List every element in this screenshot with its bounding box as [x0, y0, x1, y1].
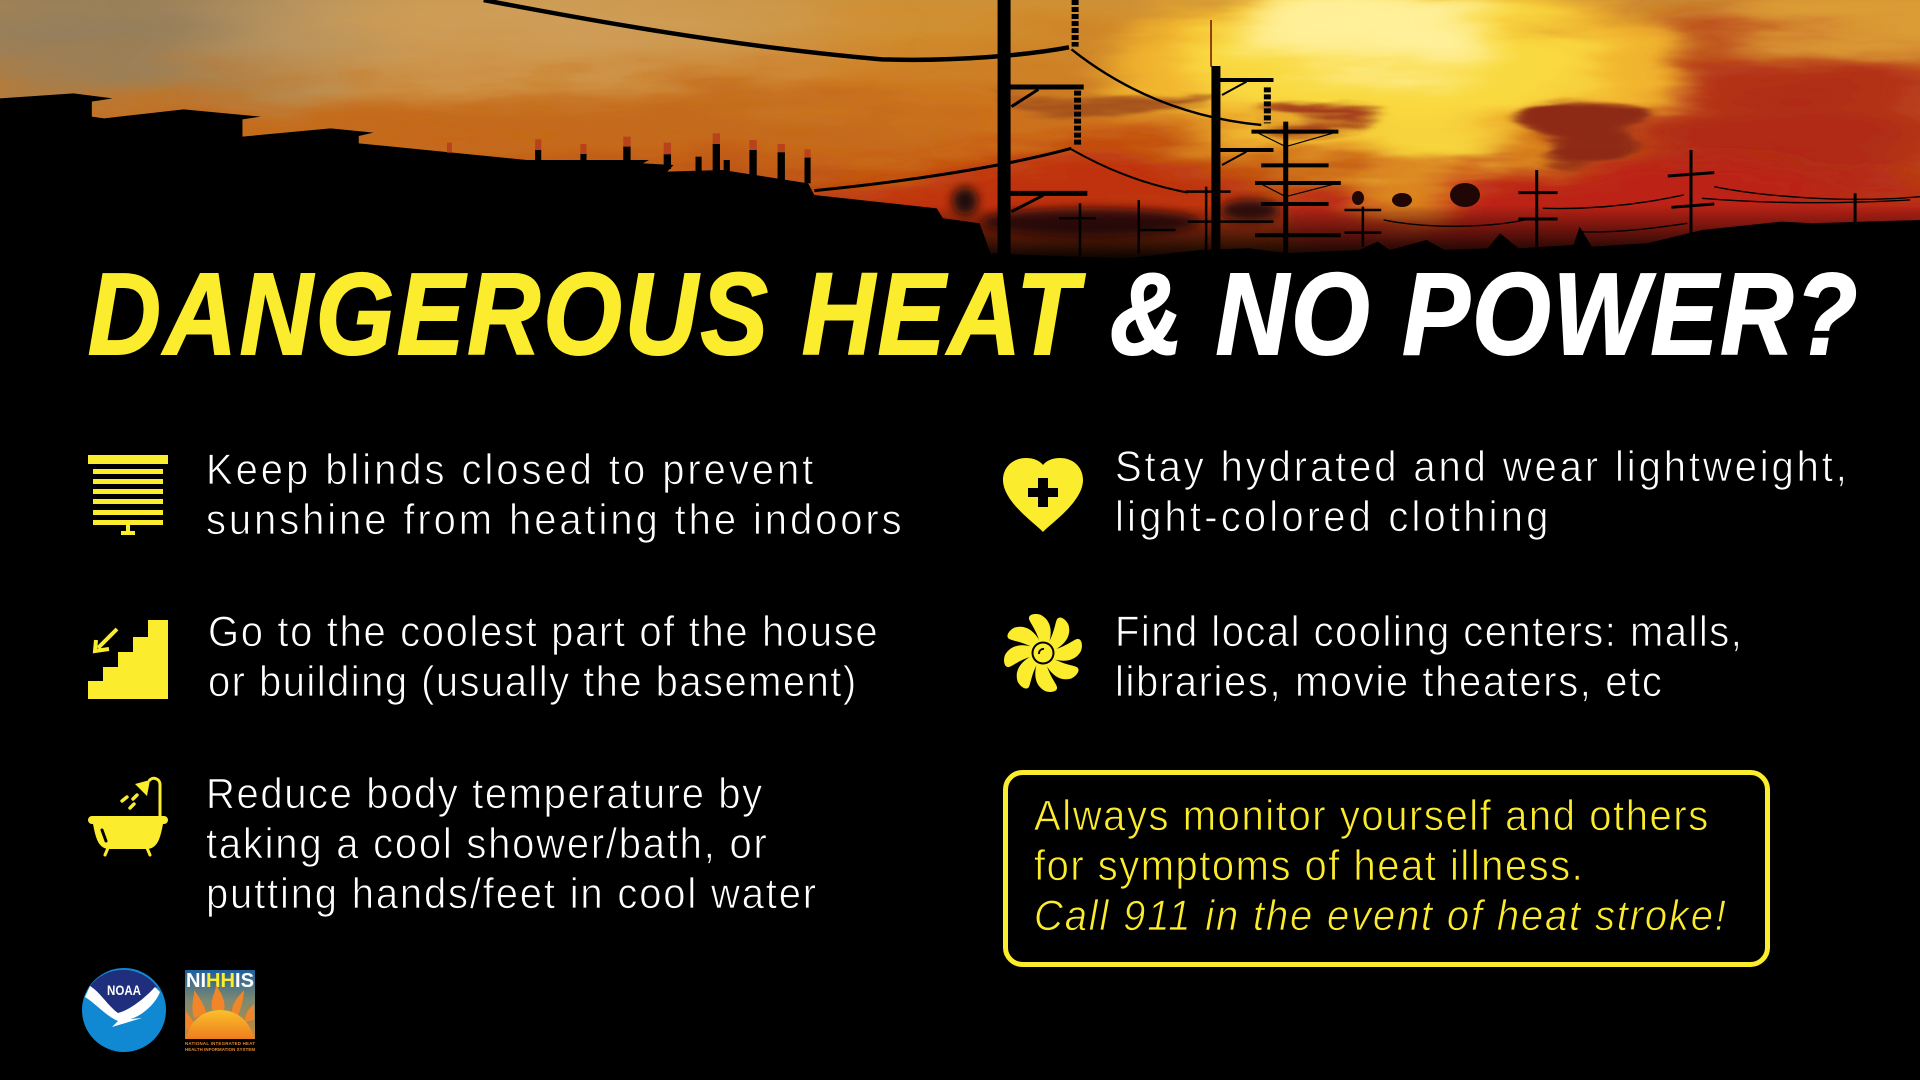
building silhouette: [0, 93, 1920, 263]
text: blinds: sunshine from heating the indoors: [206, 495, 902, 543]
icon: heart with cross: [1003, 458, 1083, 532]
tip: hydration: [1003, 442, 1847, 540]
tip: coolest part of house: [88, 607, 878, 705]
sky: [0, 0, 1920, 258]
title: yellow part: DANGEROUS HEAT: [88, 251, 1086, 380]
callout text: for symptoms of heat illness.: [1034, 841, 1583, 889]
icon: stairs with down arrow: [88, 620, 168, 699]
clouds: [952, 183, 1480, 236]
title: [88, 251, 1857, 380]
text: body temperature: [206, 769, 816, 917]
text: coolest part: or building (usually the basement): [208, 657, 856, 705]
callout text: [1034, 791, 1726, 939]
text: hydration: [1115, 442, 1847, 540]
logo: NIHHIS: NIHHIS: [186, 970, 254, 992]
text: blinds: Keep blinds closed to prevent: [206, 445, 814, 493]
text: blinds: [206, 445, 902, 543]
text: coolest part: Go to the coolest part of the house: [208, 607, 878, 655]
text: coolest part: [208, 607, 878, 705]
icon: fan: [1004, 614, 1082, 692]
logo: NIHHIS: HEALTH INFORMATION SYSTEM: [185, 1047, 255, 1052]
callout: heat illness warning: [1006, 772, 1768, 964]
callout text: Call 911 in the event of heat stroke!: [1034, 891, 1726, 939]
power lines and pylons: [484, 0, 1920, 260]
photo banner: sunset with power lines: [0, 0, 1920, 258]
callout text: Always monitor yourself and others: [1034, 791, 1708, 839]
icon: window blinds: [88, 455, 168, 535]
logo: NIHHIS: NATIONAL INTEGRATED HEAT: [185, 1041, 255, 1046]
text: body temperature: putting hands/feet in cool water: [206, 869, 816, 917]
tip: cooling centers: [1004, 607, 1742, 705]
tip: blinds: [88, 445, 902, 543]
title: white part: & NO POWER?: [1110, 251, 1857, 380]
logo: NIHHIS: [185, 970, 255, 1052]
text: hydration: Stay hydrated and wear lightweight,: [1115, 442, 1847, 490]
logo: NOAA: [82, 968, 166, 1052]
logo: NOAA: NOAA: [107, 982, 141, 998]
text: cooling centers: Find local cooling centers: malls,: [1115, 607, 1742, 655]
text: cooling centers: libraries, movie theaters, etc: [1115, 657, 1662, 705]
text: hydration: light-colored clothing: [1115, 492, 1548, 540]
icon: bathtub with shower: [88, 778, 168, 855]
text: body temperature: Reduce body temperature by: [206, 769, 762, 817]
text: cooling centers: [1115, 607, 1742, 705]
tip: body temperature: [88, 769, 816, 917]
text: body temperature: taking a cool shower/bath, or: [206, 819, 767, 867]
